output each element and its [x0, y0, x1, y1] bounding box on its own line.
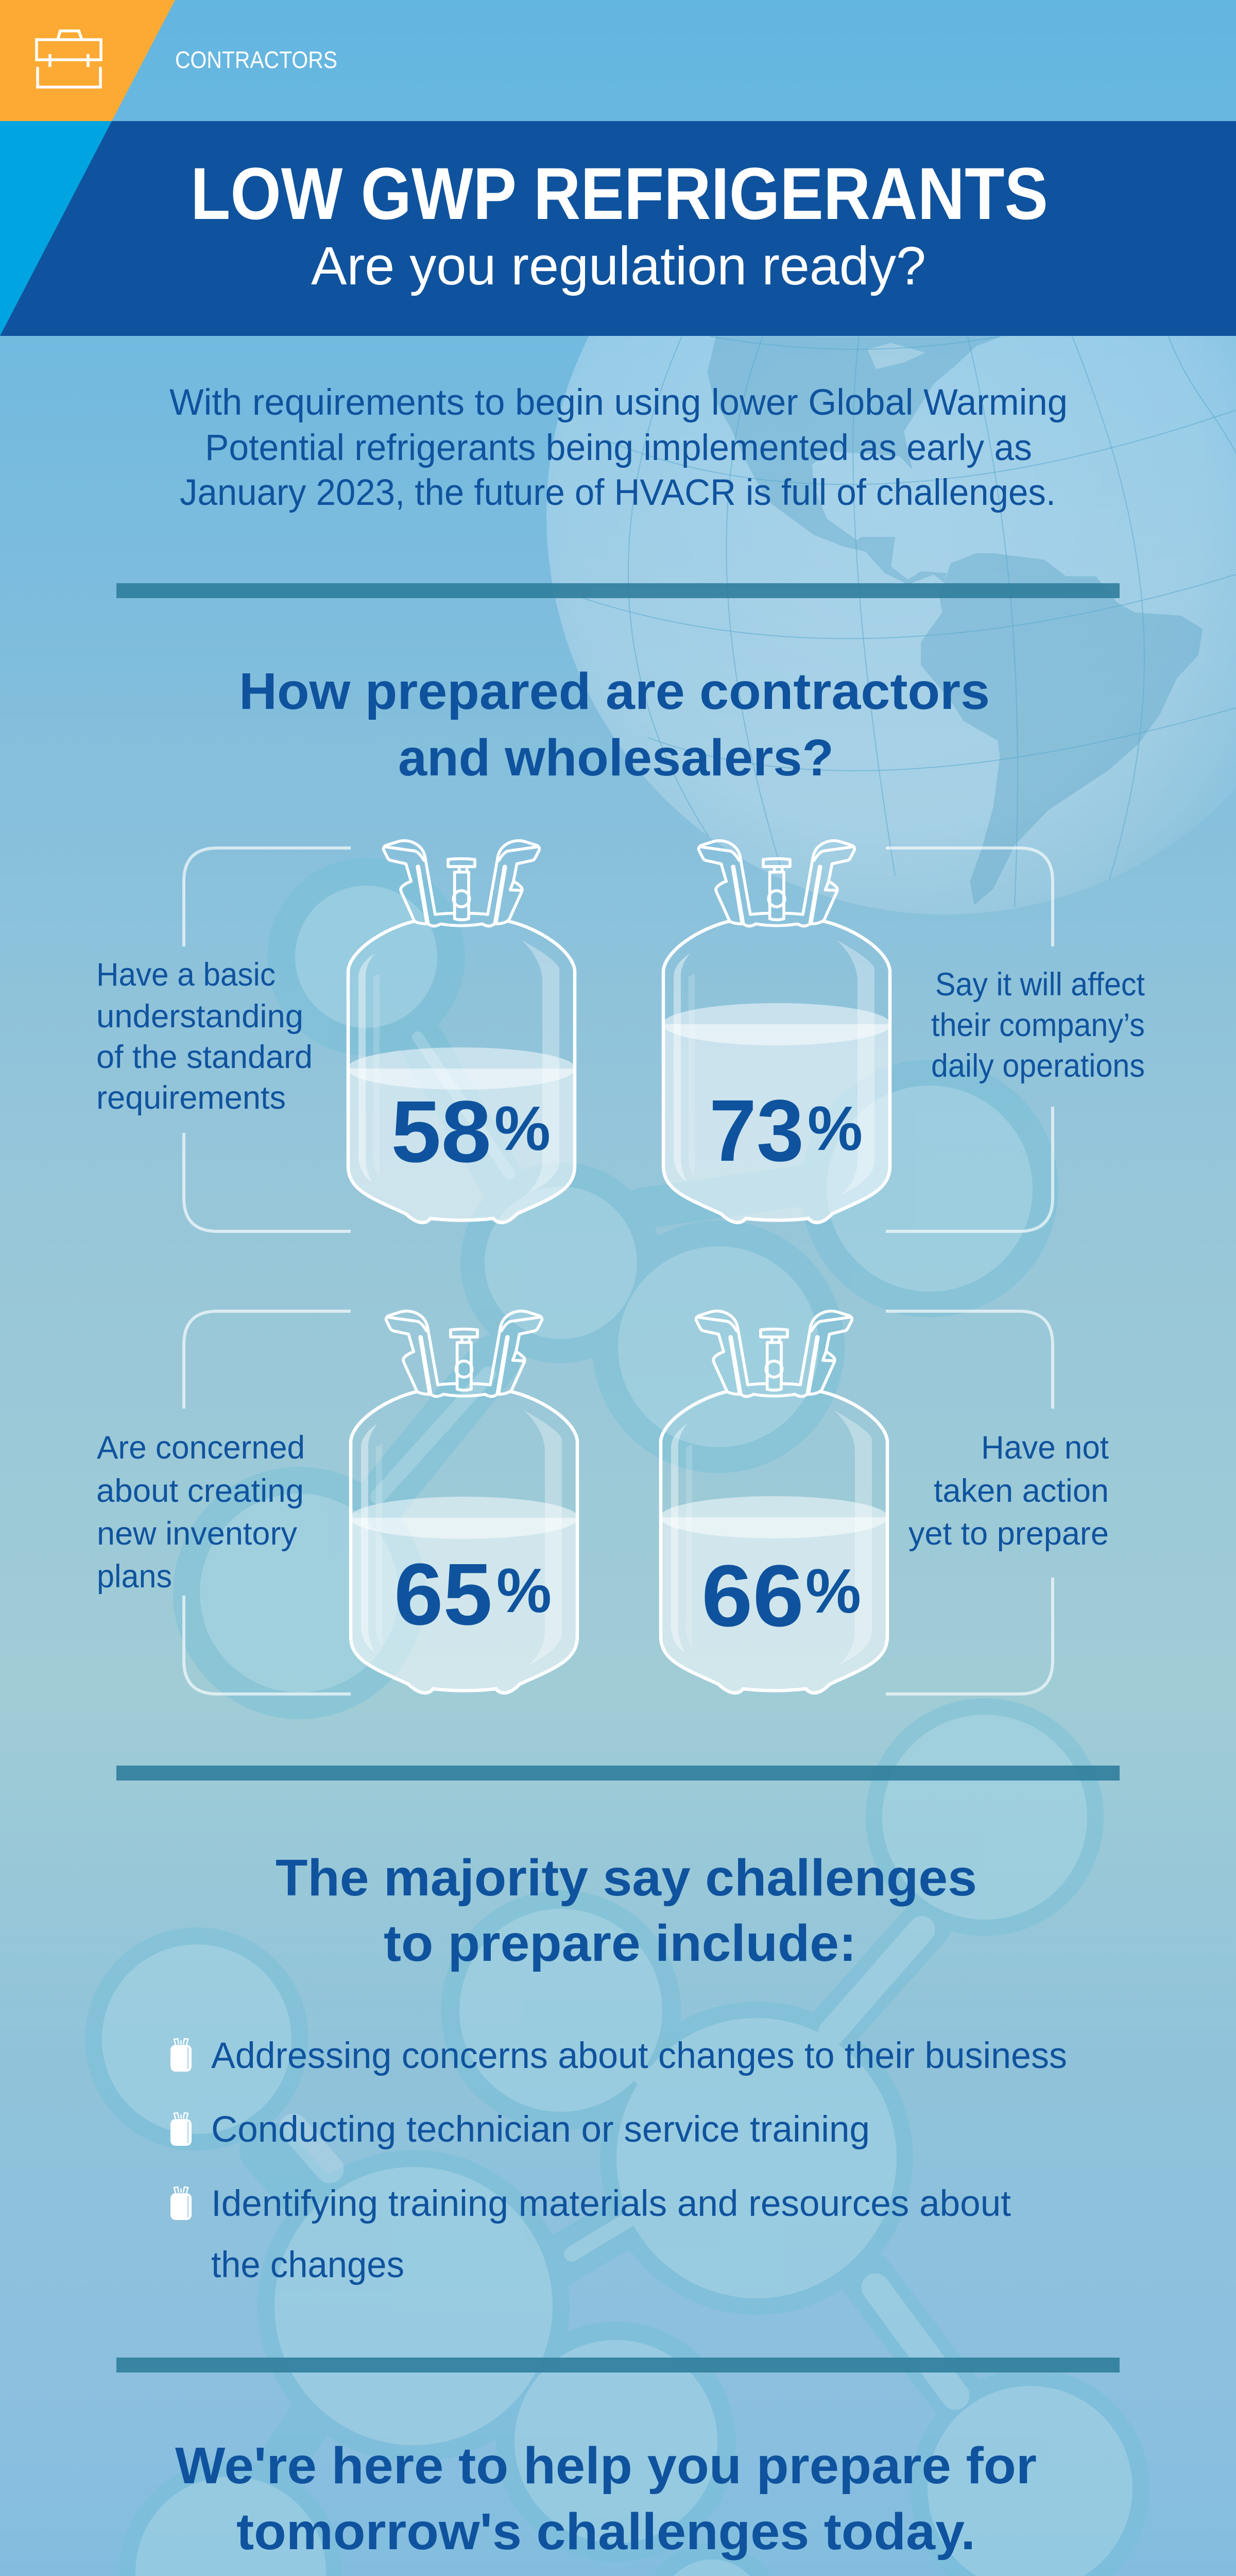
value: 65: [394, 1546, 492, 1643]
value: [391, 1083, 551, 1181]
label: yet to prepare: [908, 1516, 1109, 1552]
label: their company’s: [931, 1007, 1145, 1043]
icon: bullet tank: [170, 2187, 192, 2220]
heading: here to help: We're here to help you prepare for: [175, 2437, 1037, 2495]
list item 2: Conducting technician or service training: [211, 2109, 870, 2150]
value: %: [496, 1555, 552, 1625]
background: globe: [546, 336, 1236, 914]
list item 1: Addressing concerns about changes to their business: [211, 2036, 1067, 2076]
section label: contractors: CONTRACTORS: [175, 46, 337, 73]
list item 3: the changes: [211, 2245, 404, 2285]
heading: how prepared: [239, 663, 990, 787]
value: 66: [701, 1547, 804, 1645]
label: plans: [97, 1558, 172, 1595]
heading: how prepared: How prepared are contractors: [239, 663, 990, 720]
icon: bullet tank: [170, 2039, 192, 2072]
intro text: With requirements to begin using lower Global Warming: [169, 382, 1068, 423]
label: Have a basic: [96, 957, 276, 993]
label: about creating: [96, 1473, 304, 1509]
tank icon: [345, 841, 578, 1228]
list: challenges: [170, 2036, 1067, 2285]
label: of the standard: [96, 1039, 313, 1075]
list item 3: Identifying training materials and resources about: [211, 2183, 1011, 2224]
label: [96, 957, 313, 1116]
label: Are concerned: [97, 1430, 305, 1466]
panel: 73% daily operations: [660, 841, 1145, 1231]
heading: here to help: tomorrow's challenges today.: [236, 2503, 975, 2561]
value: %: [494, 1093, 551, 1163]
value: 58: [391, 1083, 491, 1181]
bracket: [184, 848, 351, 1231]
top banner: orange tab with briefcase: [0, 0, 175, 121]
label: taken action: [934, 1473, 1109, 1509]
label: daily operations: [931, 1048, 1145, 1084]
label: Say it will affect: [935, 967, 1145, 1003]
value: [394, 1546, 552, 1643]
value: %: [808, 1093, 863, 1163]
value: [701, 1547, 861, 1645]
label: understanding: [96, 998, 303, 1035]
header band with title: [0, 121, 1236, 336]
label: [908, 1430, 1109, 1552]
label: requirements: [96, 1080, 286, 1116]
bracket: [886, 848, 1053, 1231]
value: 73: [709, 1082, 804, 1180]
title: LOW GWP REFRIGERANTS: [191, 153, 1048, 235]
value: [709, 1082, 863, 1180]
icon: bullet tank: [170, 2113, 192, 2146]
tank icon: [660, 841, 893, 1230]
heading: majority challenges: to prepare include:: [384, 1914, 856, 1972]
heading: majority challenges: The majority say challenges: [276, 1849, 977, 1907]
heading: how prepared: and wholesalers?: [398, 729, 834, 787]
label: new inventory: [97, 1516, 297, 1552]
panel: 66% no action: [658, 1311, 1109, 1698]
label: Have not: [981, 1430, 1109, 1466]
tank icon: [658, 1311, 890, 1698]
intro text: [169, 382, 1068, 513]
label: [96, 1430, 305, 1595]
tank icon: [348, 1311, 580, 1698]
list item 3: [211, 2183, 1011, 2285]
panel: 65% inventory plans: [96, 1311, 580, 1698]
icon: briefcase: [37, 31, 101, 87]
subtitle: Are you regulation ready?: [311, 236, 926, 296]
heading: majority challenges: [276, 1849, 977, 1972]
intro text: Potential refrigerants being implemented as early as: [205, 428, 1032, 468]
panel: 58% basic understanding: [96, 841, 578, 1231]
background: magnifier lenses: [102, 886, 1132, 2576]
intro text: January 2023, the future of HVACR is full of challenges.: [180, 472, 1056, 513]
background: magnifier rings: [85, 858, 1149, 2576]
bracket: [184, 1311, 351, 1694]
bracket: [886, 1311, 1053, 1694]
value: %: [805, 1556, 861, 1626]
heading: here to help: [175, 2437, 1037, 2561]
label: [931, 967, 1145, 1084]
